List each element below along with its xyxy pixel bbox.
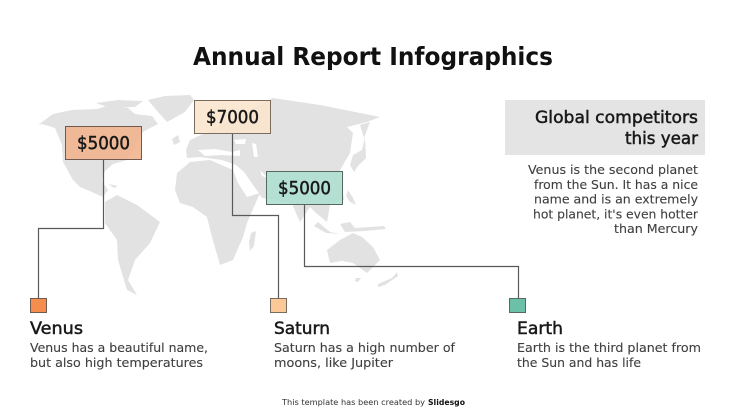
panel: global competitors heading bbox=[505, 100, 705, 155]
text block: Earth: Earth bbox=[517, 319, 563, 339]
connector: Earth bbox=[304, 204, 518, 298]
text block: Venus: Venus bbox=[30, 319, 83, 339]
panel: global competitors heading: this year bbox=[625, 129, 698, 149]
text block: global competitors description: name and is an extremely bbox=[534, 192, 699, 206]
world map bbox=[38, 95, 398, 295]
text block: Earth: the Sun and has life bbox=[517, 355, 641, 370]
footer credit: Slidesgo bbox=[428, 398, 465, 407]
text block: Earth bbox=[517, 319, 701, 370]
text block: Venus: Venus has a beautiful name, bbox=[30, 340, 208, 355]
marker: Saturn bbox=[270, 298, 286, 312]
marker: Earth bbox=[510, 298, 526, 312]
text block: global competitors description: from the Sun. It has a nice bbox=[534, 177, 698, 192]
text block: Venus: but also high temperatures bbox=[30, 355, 203, 370]
map seas bbox=[198, 139, 268, 194]
value box: Earth $5000: $5000 bbox=[278, 178, 331, 199]
text block: global competitors description: than Mercury bbox=[614, 221, 699, 236]
text block: global competitors description: hot planet, it's even hotter bbox=[533, 206, 699, 222]
text block: global competitors description bbox=[528, 162, 699, 236]
connector: Venus bbox=[38, 159, 104, 298]
text block: Saturn: moons, like Jupiter bbox=[274, 355, 394, 370]
text block: Venus bbox=[30, 319, 208, 370]
value box: Venus $5000 bbox=[66, 126, 142, 160]
value box: Saturn $7000: $7000 bbox=[206, 107, 259, 128]
connector: Saturn bbox=[232, 133, 278, 298]
text block: Saturn: Saturn bbox=[274, 319, 330, 339]
text block: Earth: Earth is the third planet from bbox=[517, 340, 701, 355]
text block: global competitors description: Venus is the second planet bbox=[528, 162, 698, 177]
value box: Venus $5000: $5000 bbox=[77, 133, 130, 154]
marker: Venus bbox=[30, 298, 46, 312]
title: Annual Report Infographics bbox=[193, 42, 553, 71]
value box: Saturn $7000 bbox=[194, 100, 270, 134]
text block: Saturn: Saturn has a high number of bbox=[274, 340, 456, 355]
text block: Saturn bbox=[274, 319, 456, 370]
panel: global competitors heading: Global competitors bbox=[535, 108, 698, 128]
footer credit: This template has been created by bbox=[281, 398, 426, 407]
value box: Earth $5000 bbox=[266, 172, 342, 204]
